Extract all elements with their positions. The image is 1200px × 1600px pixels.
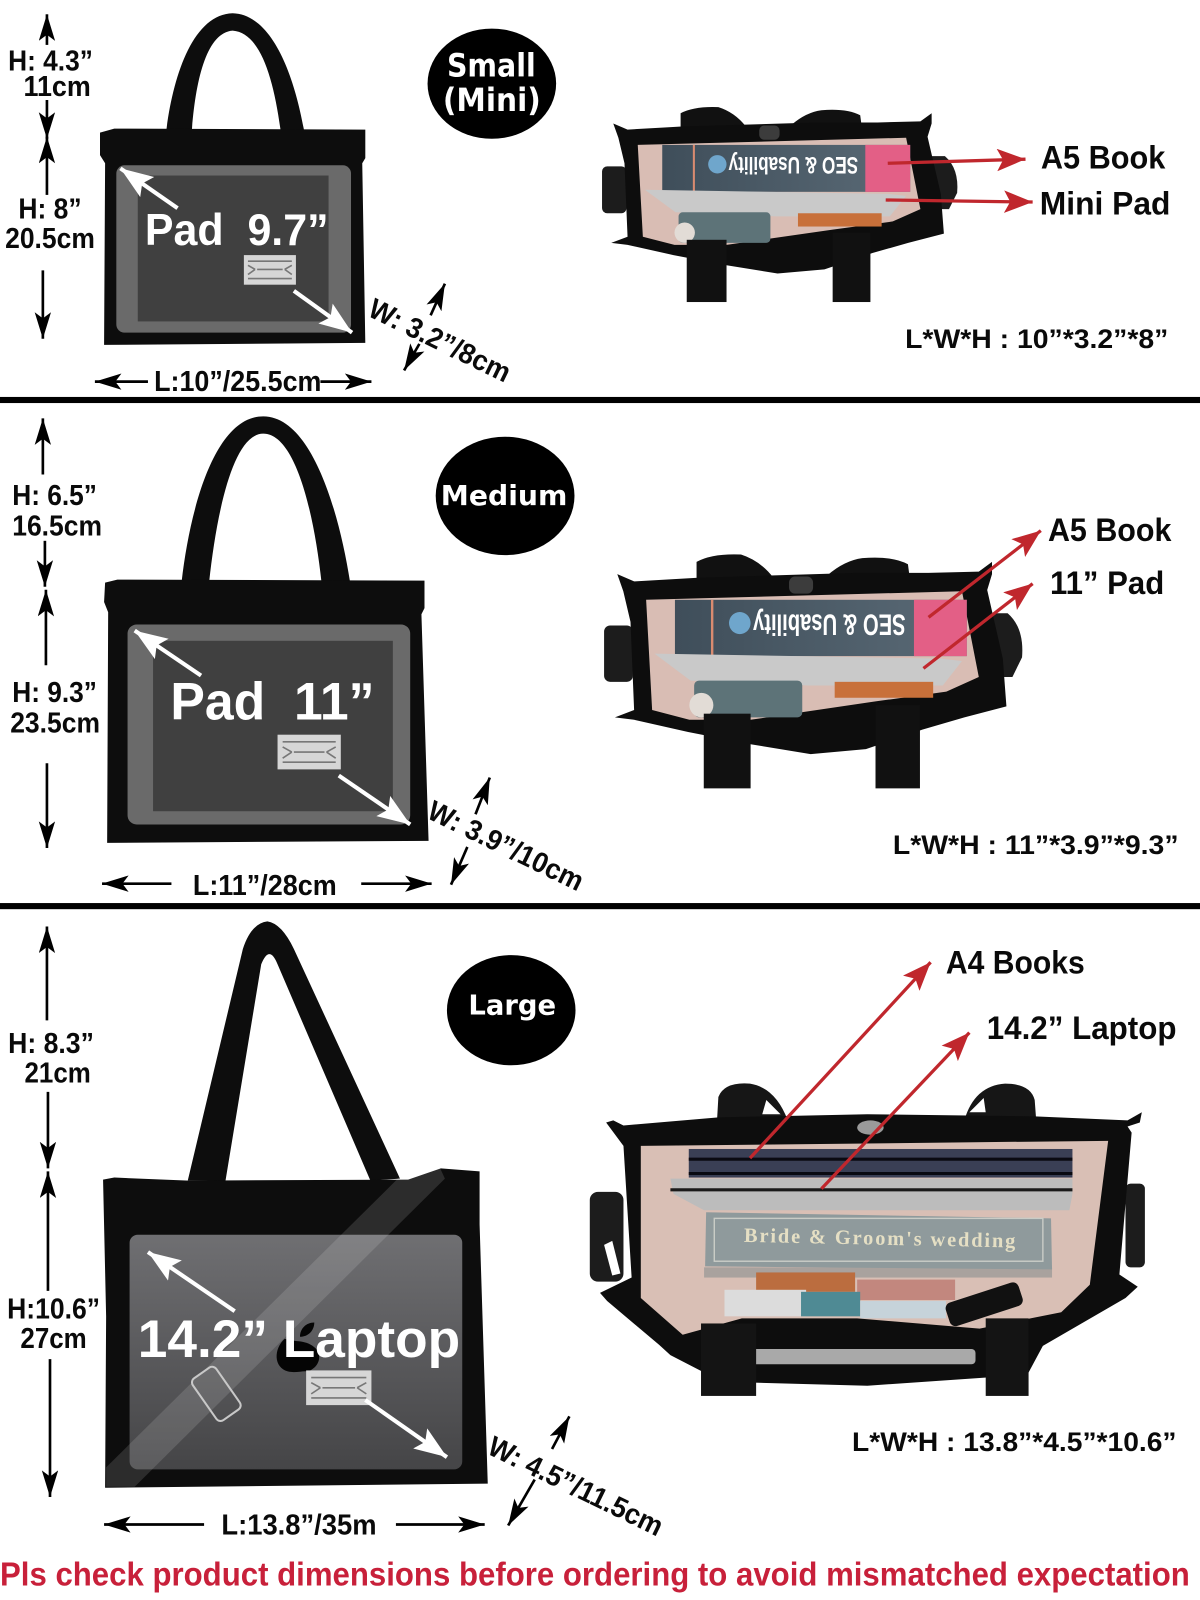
size badge: medium: Medium — [441, 480, 567, 512]
small bag front view — [100, 13, 365, 345]
length dimension: L:10”/25.5cm — [154, 366, 321, 398]
dimensions summary: large: L*W*H : 13.8”*4.5”*10.6” — [852, 1427, 1177, 1457]
large bag front view — [103, 921, 488, 1488]
arrow: pad diagonal top — [135, 631, 201, 676]
arrow: A5 book — [888, 159, 1026, 163]
arrow: pad diagonal bottom — [294, 291, 352, 333]
handle height dimension — [8, 927, 94, 1168]
dimensions summary: small: L*W*H : 10”*3.2”*8” — [905, 324, 1168, 354]
width dimension: W: 3.2”/8cm — [363, 293, 516, 389]
size badge: small: (Mini) — [443, 83, 541, 119]
large bag top view — [590, 1083, 1145, 1396]
medium bag top view: SEO & Usability — [752, 607, 906, 640]
body height dimension: H:10.6” — [7, 1293, 100, 1325]
body height dimension: 23.5cm — [10, 708, 100, 740]
handle height dimension: H: 8.3” — [8, 1028, 94, 1060]
size badge: large: Large — [468, 989, 556, 1021]
arrow: laptop diagonal bottom — [365, 1400, 447, 1457]
medium bag front view — [104, 416, 429, 843]
panel: small size — [5, 13, 1170, 398]
label: pad 11: Pad 11” — [170, 672, 374, 731]
body height dimension — [10, 590, 100, 848]
arrow: A5 book — [929, 531, 1041, 617]
size badge: medium — [436, 437, 574, 555]
arrow: mini pad — [886, 200, 1033, 202]
panel: large size — [7, 921, 1177, 1543]
body height dimension: H: 8” — [18, 193, 82, 225]
arrow: laptop diagonal top — [148, 1252, 235, 1311]
dimensions summary: medium: L*W*H : 11”*3.9”*9.3” — [893, 830, 1179, 860]
medium bag top view — [604, 554, 1022, 788]
label: A4 books: A4 Books — [946, 943, 1085, 980]
arrow: pad diagonal bottom — [339, 776, 410, 824]
size badge: small: Small — [447, 49, 536, 85]
arrow: 14.2 inch laptop — [821, 1033, 969, 1189]
body height dimension — [5, 137, 95, 339]
label: 14.2 inch laptop: 14.2” Laptop — [138, 1310, 460, 1369]
length dimension: L:11”/28cm — [193, 870, 337, 902]
handle height dimension: 21cm — [24, 1058, 91, 1090]
arrow: A4 books — [750, 962, 931, 1158]
small bag top view: SEO & Usability — [728, 151, 858, 178]
width dimension: W: 4.5”/11.5cm — [483, 1431, 668, 1543]
handle height dimension: H: 4.3” — [8, 45, 93, 77]
body height dimension: H: 9.3” — [12, 677, 97, 709]
size badge: small — [428, 29, 556, 139]
handle height dimension — [8, 14, 93, 139]
body height dimension: 20.5cm — [5, 223, 95, 255]
size badge: large — [447, 955, 576, 1065]
handle height dimension: 16.5cm — [12, 511, 102, 543]
handle height dimension: H: 6.5” — [12, 480, 97, 512]
width dimension: W: 3.9”/10cm — [422, 795, 589, 898]
arrow: 11 inch pad — [923, 584, 1033, 668]
label: A5 book: A5 Book — [1041, 138, 1166, 175]
body height dimension: 27cm — [20, 1323, 87, 1355]
body height dimension — [7, 1171, 100, 1497]
label: 11 inch pad: 11” Pad — [1050, 564, 1164, 601]
label: A5 book: A5 Book — [1048, 511, 1172, 548]
handle height dimension — [12, 418, 102, 587]
handle height dimension: 11cm — [23, 71, 91, 103]
label: 14.2 inch laptop: 14.2” Laptop — [987, 1009, 1177, 1046]
large bag top view: Bride & Groom's wedding — [744, 1225, 1016, 1253]
label: mini pad: Mini Pad — [1040, 184, 1170, 221]
panel: medium size — [10, 416, 1179, 902]
small bag top view — [602, 107, 957, 302]
length dimension: L:13.8”/35m — [221, 1510, 377, 1542]
arrow: pad diagonal top — [120, 168, 178, 208]
label: pad 9.7: Pad 9.7” — [145, 204, 329, 255]
